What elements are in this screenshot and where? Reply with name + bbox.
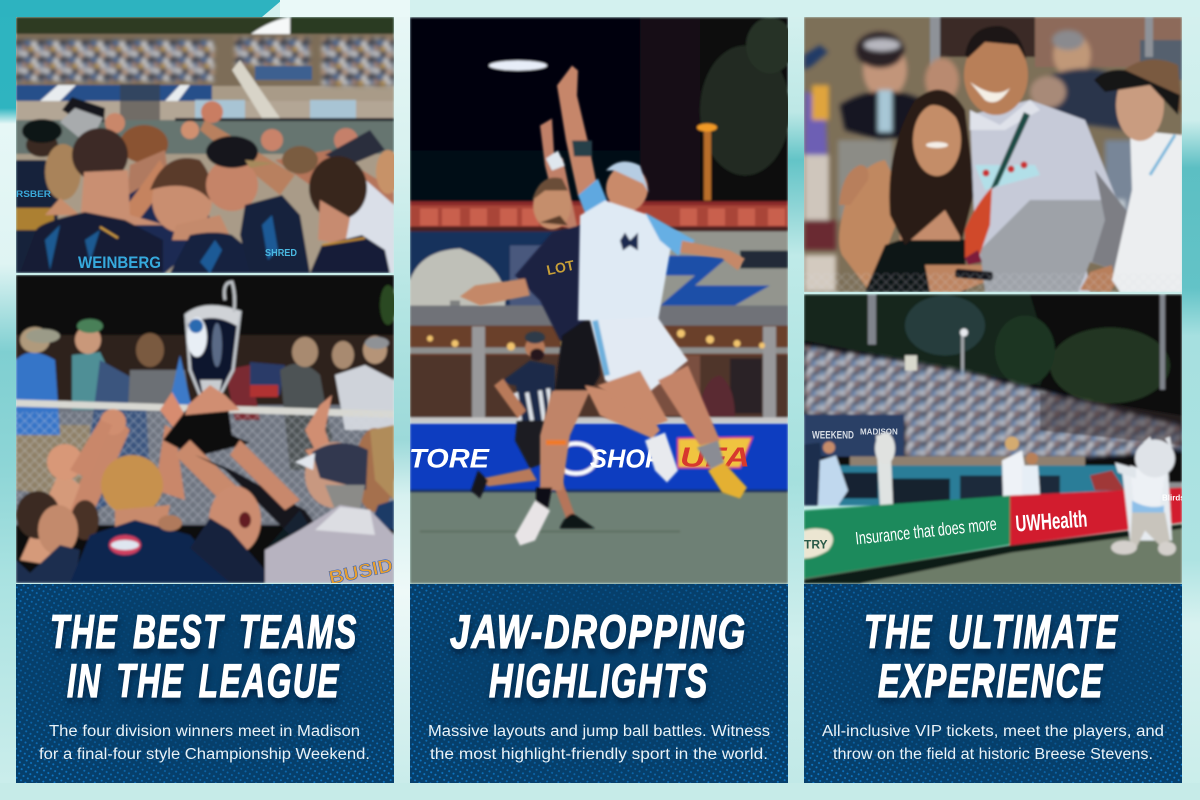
field <box>804 524 1182 584</box>
lot text on jersey: LOT <box>545 257 576 278</box>
hands and arms <box>20 470 80 565</box>
jersey name: WEINBERG: WEINBERG <box>78 253 161 272</box>
jersey name: left player: RSBER <box>16 189 52 199</box>
banner text: championship weekend: WEEKEND <box>812 430 854 442</box>
photo: jump ball <box>410 17 788 584</box>
man <box>970 100 1130 292</box>
photo: team huddle <box>16 17 394 273</box>
photo: fans smiling <box>804 17 1182 292</box>
trophy <box>186 307 240 395</box>
LED board text: shop: SHOP <box>590 444 663 474</box>
player in light blue <box>557 66 747 498</box>
panel: experience text <box>804 584 1182 783</box>
column 1: the best teams <box>16 17 394 783</box>
description <box>428 723 770 763</box>
column 2: jaw-dropping highlights <box>410 17 788 783</box>
woman <box>839 160 905 292</box>
description: throw on the field at historic Breese Stevens. <box>833 746 1153 763</box>
photo: stadium crowd and mascot <box>804 294 1182 584</box>
description: The four division winners meet in Madison <box>49 723 360 740</box>
LED board text: UFA: UFA <box>680 442 750 472</box>
advertising boards <box>804 496 1010 580</box>
jersey name: SHRED: SHRED <box>265 248 297 259</box>
board text: UW Health: UWHealth <box>1015 506 1088 536</box>
panel: highlights text <box>410 584 788 783</box>
crowd foreground <box>16 160 60 273</box>
description: All-inclusive VIP tickets, meet the players, and <box>822 723 1164 740</box>
description: the most highlight-friendly sport in the world. <box>430 746 768 763</box>
player in navy <box>460 118 678 546</box>
board text: left sponsor: TRY <box>804 538 828 552</box>
description <box>39 723 370 763</box>
column 3: the ultimate experience <box>804 17 1182 783</box>
photo: trophy celebration <box>16 275 394 583</box>
description: Massive layouts and jump ball battles. Witness <box>428 723 770 740</box>
heading <box>450 605 747 707</box>
panel: best teams text <box>16 584 394 783</box>
heading <box>864 605 1119 707</box>
description: for a final-four style Championship Weekend. <box>39 746 370 763</box>
heading <box>50 605 358 707</box>
banner text: madison: MADISON <box>860 428 898 436</box>
referee <box>471 332 595 528</box>
right man <box>1112 130 1182 292</box>
description <box>822 723 1164 763</box>
LED board text: store: TORE <box>410 444 490 474</box>
board text: insurance: Insurance that does more <box>854 514 998 548</box>
mascot <box>1122 468 1172 540</box>
